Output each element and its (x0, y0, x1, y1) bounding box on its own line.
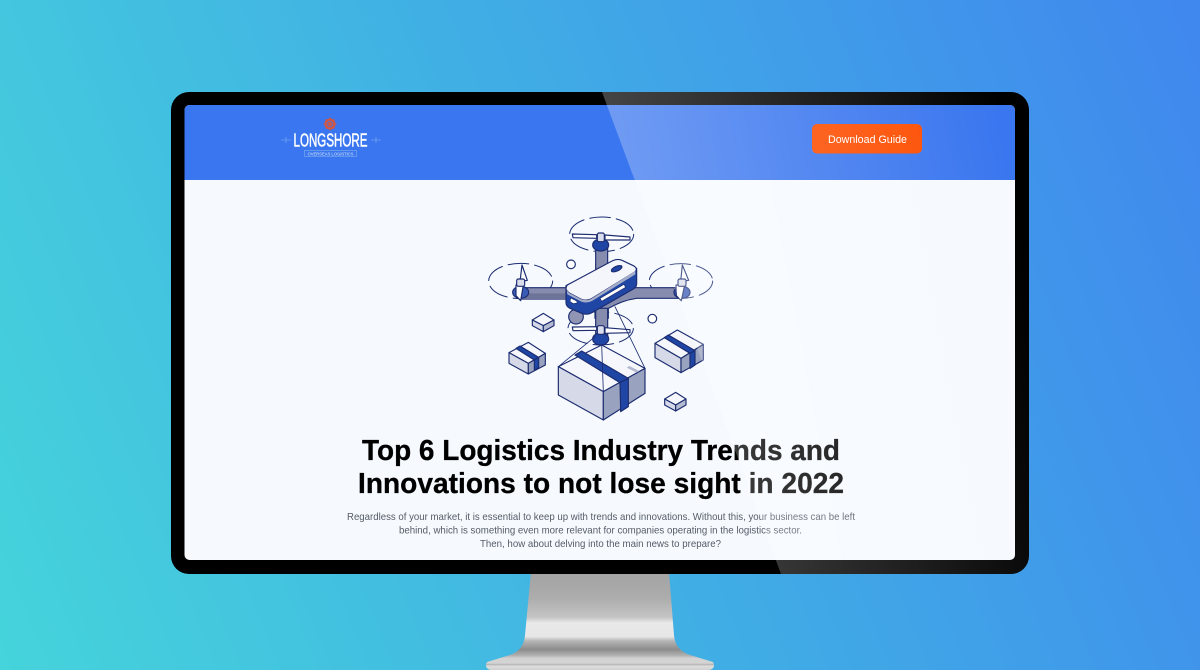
screen glare (602, 92, 1029, 574)
right rotor (674, 265, 690, 301)
big parcel (558, 345, 645, 420)
drone arms (522, 247, 680, 337)
front rotor (572, 326, 630, 345)
rear rotor (572, 233, 630, 251)
download button: Download Guide (828, 134, 907, 146)
header bar (184, 105, 1015, 180)
floating circles (567, 260, 657, 323)
small cube upper (532, 313, 554, 332)
logo tagline: OVERSEAS LOGISTICS (308, 151, 354, 156)
screen (184, 105, 1015, 560)
download button (812, 124, 922, 154)
drone illustration (489, 217, 713, 420)
title: Innovations to not lose sight in 2022 (358, 468, 844, 500)
small cube lower (665, 392, 686, 411)
logo (281, 118, 381, 156)
drone body (566, 259, 637, 314)
intro paragraph: Regardless of your market, it is essential to keep up with trends and innovations. Without this, your business can be left (347, 512, 855, 523)
logo wordmark: LONGSHORE (294, 130, 368, 150)
intro paragraph: Then, how about delving into the main news to prepare? (480, 539, 721, 550)
intro paragraph (347, 512, 855, 550)
monitor stand (486, 572, 714, 670)
camera (569, 309, 583, 324)
intro paragraph: behind, which is something even more relevant for companies operating in the logistics sector. (399, 526, 802, 536)
parcel suspension lines (558, 307, 645, 392)
rotor sweep circles (489, 217, 713, 345)
parcel left (509, 342, 545, 374)
left rotor (513, 265, 529, 301)
title (358, 435, 844, 500)
title: Top 6 Logistics Industry Trends and (362, 435, 840, 467)
monitor frame (171, 92, 1029, 574)
logo icon: ship wheel (324, 118, 336, 130)
parcel right (655, 330, 703, 373)
